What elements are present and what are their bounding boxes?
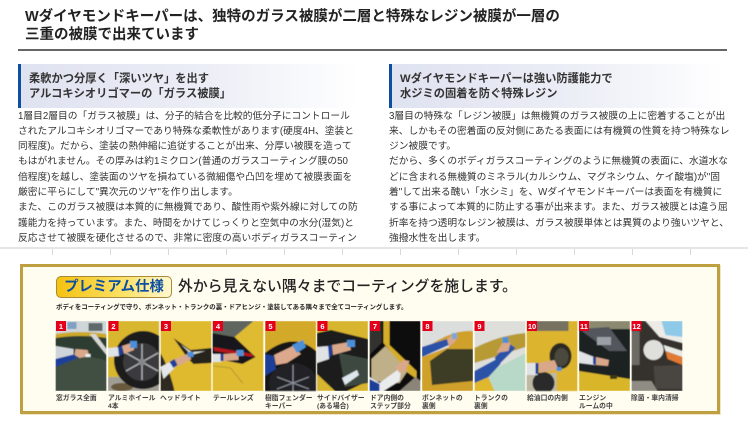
text block: resin coating: 3層目の特殊な「レジン被膜」は無機質のガラス被膜の上に密着することが出 bbox=[389, 111, 725, 122]
badge numbers: 10 bbox=[528, 322, 536, 331]
photo 4: tail lens bbox=[212, 321, 264, 391]
photo 1: window glass bbox=[56, 321, 106, 391]
title: 三重の被膜で出来ています bbox=[25, 27, 199, 43]
text block: resin coating: どに含まれる無機質のミネラル(カルシウム、マグネシウム、ケイ酸塩)が"固 bbox=[389, 172, 720, 183]
label 7 bbox=[370, 394, 411, 410]
badge numbers: 5 bbox=[268, 322, 273, 331]
badge numbers: 11 bbox=[580, 322, 588, 331]
label 9: 裏側 bbox=[474, 403, 488, 410]
label 5: キーパー bbox=[265, 403, 292, 410]
text block: glass coating: 同程度)。だから、塗装の熱伸縮に追従することが出来、分厚い被膜を造って bbox=[18, 141, 352, 152]
label 9: トランクの bbox=[474, 394, 508, 402]
text block: resin coating: だから、多くのボディガラスコーティングのように無機質の表面に、水道水な bbox=[389, 156, 728, 167]
badge numbers: 1 bbox=[59, 322, 63, 331]
label 9 bbox=[474, 394, 508, 410]
badge numbers: 8 bbox=[425, 322, 430, 331]
banner subheading: ボディをコーティングで守り、ボンネット・トランクの裏・ドアヒンジ・塗装してある隅々まで全てコーティングします。 bbox=[56, 304, 407, 311]
label 5: 樹脂フェンダー bbox=[265, 394, 313, 402]
panel: premium banner bbox=[20, 264, 720, 414]
badge numbers: 2 bbox=[111, 322, 116, 331]
text block: resin coating: ジン被膜です。 bbox=[389, 141, 456, 152]
label 6: (ある場合) bbox=[317, 403, 349, 410]
text block: resin coating: 来、しかもその密着面の反対側にあたる表面には有機質の性質を持つ特殊なレ bbox=[389, 126, 730, 137]
photo 7: door step bbox=[370, 321, 420, 391]
photo 12: interior cleaning bbox=[632, 321, 682, 391]
label 8 bbox=[422, 394, 463, 410]
text block: glass coating: 反応させて被膜を硬化させるので、非常に密度の高いボディガラスコーティン bbox=[18, 233, 357, 244]
title: Wダイヤモンドキーパーは、独特のガラス被膜が二層と特殊なレジン被膜が一層の bbox=[25, 9, 560, 25]
panel heading: resin coating: 水ジミの固着を防ぐ特殊レジン bbox=[400, 88, 558, 100]
photo 8: bonnet underside bbox=[422, 321, 473, 391]
text block: resin coating bbox=[389, 110, 730, 244]
badge numbers: 4 bbox=[216, 322, 221, 331]
text block: resin coating: 着"して出来る醜い「水シミ」を、Wダイヤモンドキーパーは表面を有機質に bbox=[389, 187, 722, 198]
label 6: サイドバイザー bbox=[317, 394, 365, 402]
photo 10: fuel filler bbox=[526, 321, 578, 394]
text block: glass coating: 護能力を持っています。また、時間をかけてじっくりと空気中の水分(湿気)と bbox=[18, 218, 354, 229]
text block: resin coating: する事によって本質的に防止する事が出来ます。また、ガラス被膜とは違う屈 bbox=[389, 202, 728, 213]
badge numbers: 9 bbox=[477, 322, 482, 331]
text block: glass coating: されたアルコキシオリゴマーであり特殊な柔軟性があります(硬度4H、塗装と bbox=[18, 126, 354, 137]
panel heading: glass coating bbox=[18, 64, 358, 108]
label 7: ドア内側の bbox=[370, 394, 404, 402]
label 2: アルミホイール bbox=[108, 394, 156, 402]
photo 2: aluminium wheels bbox=[108, 321, 172, 391]
label 6 bbox=[317, 394, 365, 410]
panel heading: resin coating bbox=[389, 64, 724, 108]
text block: glass coating: 倍程度)を越し、塗装面のツヤを損ねている微細傷や凸凹を埋めて被膜表面を bbox=[18, 172, 352, 183]
label 8: 裏側 bbox=[422, 403, 436, 410]
badge numbers bbox=[59, 322, 641, 331]
photo 9: trunk underside bbox=[474, 321, 526, 391]
label 8: ボンネットの bbox=[422, 394, 463, 402]
badge: premium spec: プレミアム仕様 bbox=[64, 279, 164, 295]
photo 3: headlight bbox=[160, 321, 212, 391]
badge numbers: 7 bbox=[373, 322, 377, 331]
banner heading: 外から見えない隅々までコーティングを施します。 bbox=[178, 279, 517, 295]
panel heading: glass coating: 柔軟かつ分厚く「深いツヤ」を出す bbox=[29, 73, 209, 85]
label 4: テールレンズ bbox=[213, 394, 254, 402]
title bbox=[25, 8, 560, 43]
label 1: 窓ガラス全面 bbox=[56, 394, 97, 402]
label 2 bbox=[108, 394, 156, 410]
badge numbers: 3 bbox=[164, 322, 168, 331]
panel heading: glass coating: アルコキシオリゴマーの「ガラス被膜」 bbox=[29, 88, 231, 100]
photo 5: fender keeper bbox=[265, 321, 317, 403]
label 11: ルームの中 bbox=[579, 403, 613, 410]
text block: resin coating: 強撥水性を出します。 bbox=[389, 233, 485, 244]
label 10: 給油口の内側 bbox=[527, 394, 568, 402]
panel heading: resin coating: Wダイヤモンドキーパーは強い防護能力で bbox=[400, 73, 613, 85]
photo 6: side visor bbox=[317, 321, 368, 391]
text block: glass coating: 厳密に平らにして"異次元のツヤ"を作り出します。 bbox=[18, 187, 238, 198]
label 12: 除菌・車内清掃 bbox=[631, 394, 679, 402]
text block: glass coating: 1層目2層目の「ガラス被膜」は、分子的結合を比較的低分子にコントロール bbox=[18, 111, 350, 122]
badge numbers: 12 bbox=[632, 322, 641, 331]
label 2: 4本 bbox=[108, 403, 119, 410]
badge: premium spec bbox=[56, 276, 172, 298]
text block: glass coating: また、このガラス被膜は本質的に無機質であり、酸性雨や紫外線に対しての防 bbox=[18, 202, 358, 213]
label 7: ステップ部分 bbox=[370, 403, 411, 410]
label 11 bbox=[579, 394, 613, 410]
text block: glass coating bbox=[18, 110, 358, 244]
label 5 bbox=[265, 394, 313, 410]
label 11: エンジン bbox=[579, 394, 606, 402]
photo 11: engine room bbox=[579, 321, 630, 391]
badge numbers: 6 bbox=[320, 322, 325, 331]
text block: glass coating: もはがれません。その厚みは約1ミクロン(普通のガラスコーティング膜の50 bbox=[18, 156, 348, 167]
text block: resin coating: 折率を持つ透明なレジン被膜は、ガラス被膜単体とは異質のより強いツヤと、 bbox=[389, 218, 729, 229]
label 3: ヘッドライト bbox=[160, 394, 201, 402]
number badges bbox=[56, 321, 642, 331]
